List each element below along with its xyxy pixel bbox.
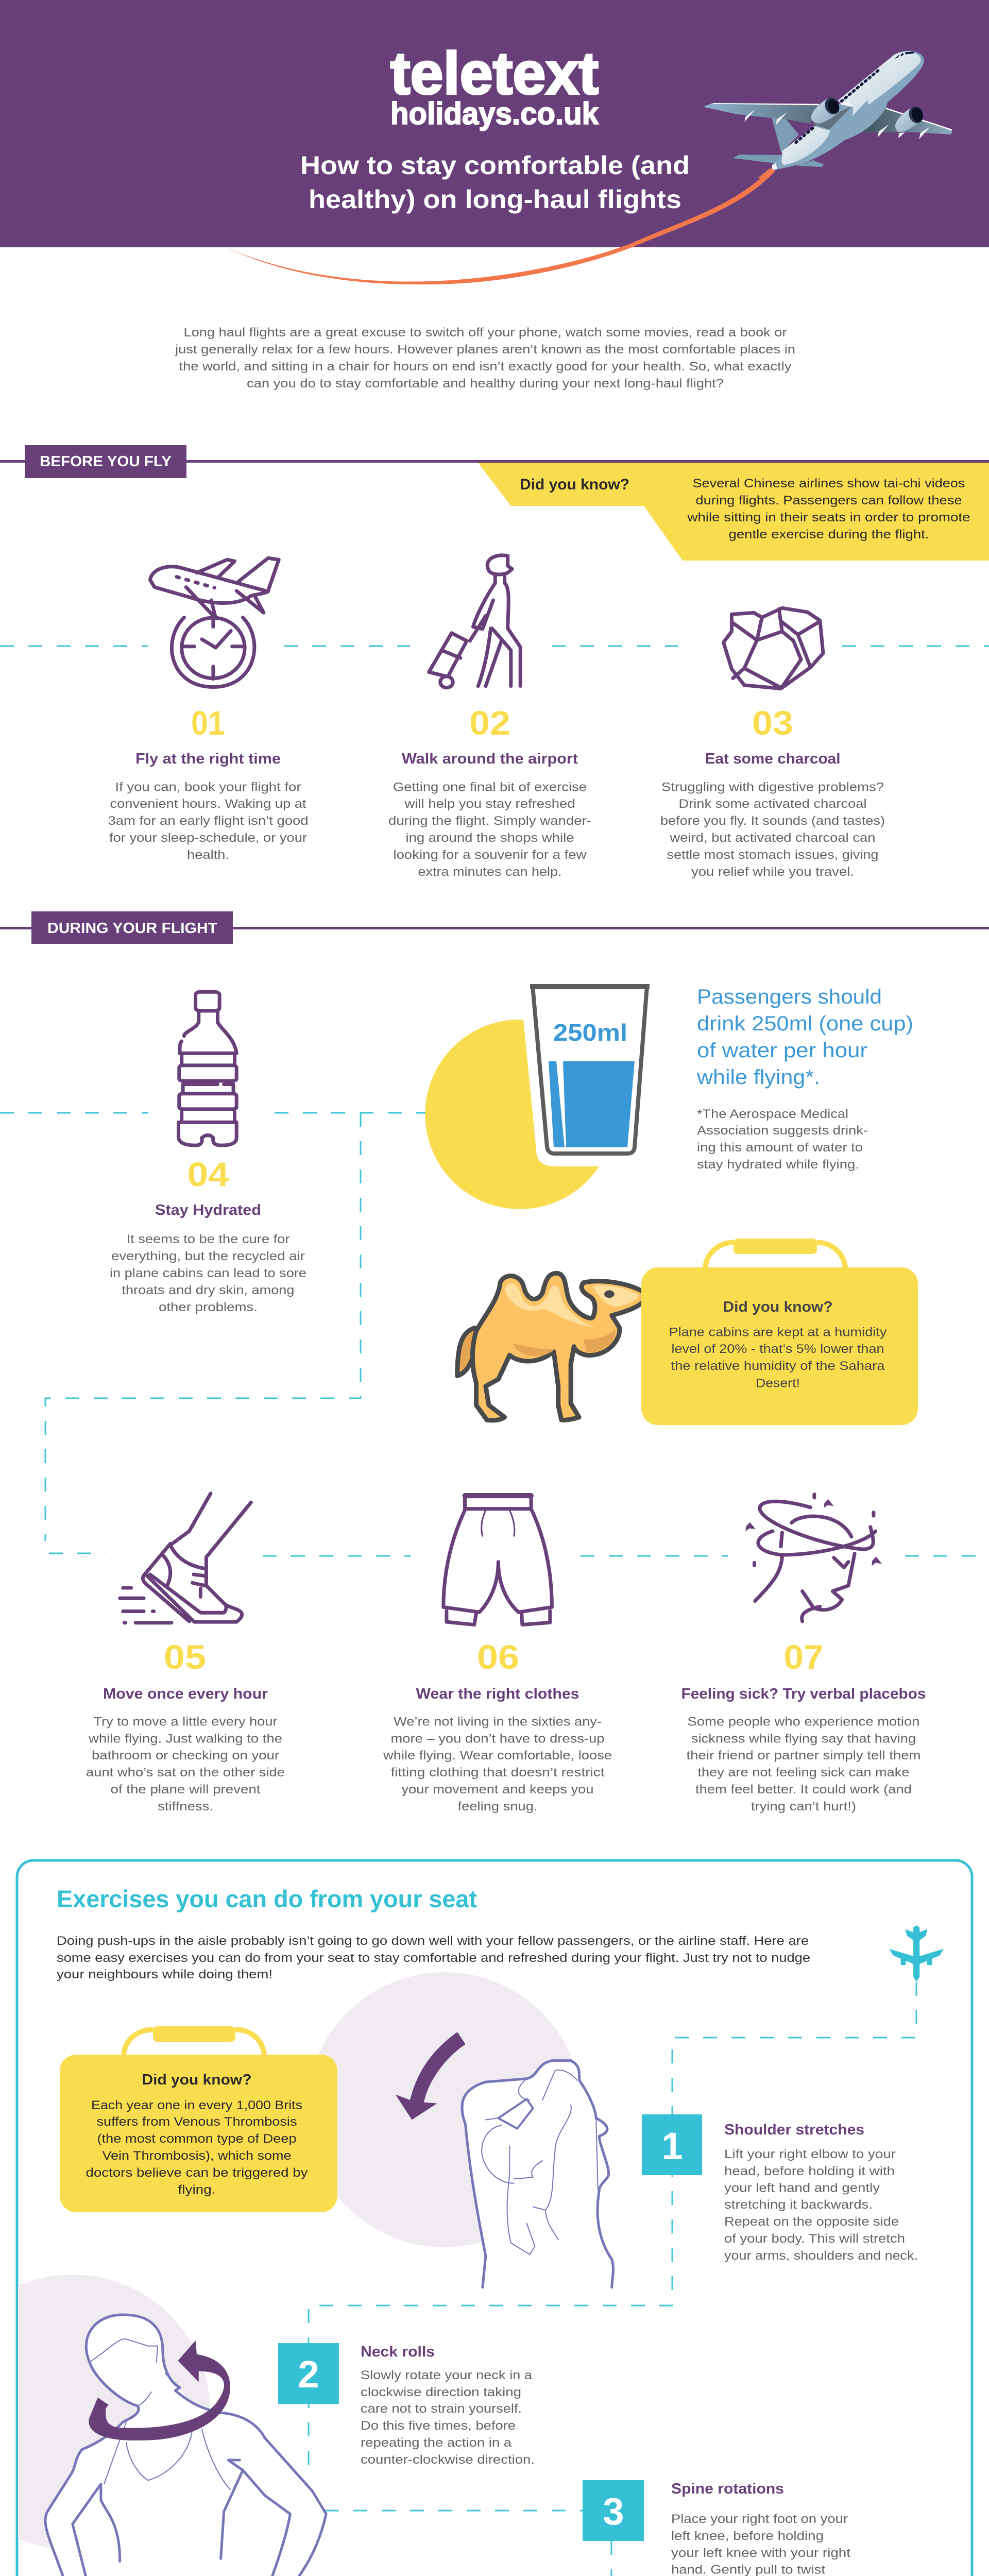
tip 03: weird, but activated charcoal can	[669, 831, 876, 845]
exercises intro: some easy exercises you can do from your seat to stay comfortable and refreshed during your flight. Just try not to nudge	[57, 1951, 810, 1965]
connector: during your flight	[0, 1113, 976, 1556]
tip 04: It seems to be the cure for	[127, 1232, 289, 1246]
stat: water per hour	[696, 986, 913, 1089]
stat: water per hour: while flying*.	[696, 1066, 820, 1089]
step 1 text: your left hand and gently	[724, 2181, 880, 2195]
step 2 text: Slowly rotate your neck in a	[361, 2368, 533, 2382]
callout: cabin humidity suitcase: Plane cabins are kept at a humidity	[669, 1325, 887, 1340]
tip 01: Fly at the right time	[135, 751, 281, 767]
tip 07: 07	[784, 1638, 823, 1676]
tip 04: throats and dry skin, among	[122, 1283, 295, 1297]
exercises intro: your neighbours while doing them!	[57, 1968, 272, 1981]
step 3 text: Place your right foot on your	[671, 2512, 848, 2526]
icon: dizzy head	[745, 1494, 882, 1621]
callout: tai-chi did you know: while sitting in their seats in order to promote	[687, 511, 970, 524]
callout: DVT suitcase: suffers from Venous Thrombosis	[97, 2115, 297, 2129]
callout: cabin humidity suitcase: the relative humidity of the Sahara	[671, 1359, 885, 1373]
callout: DVT suitcase: flying.	[178, 2183, 215, 2197]
tip 02: extra minutes can help.	[418, 865, 561, 879]
connector: before you fly	[0, 645, 989, 647]
tip 02: will help you stay refreshed	[404, 797, 575, 811]
logo: teletext	[390, 40, 599, 107]
figure: neck roll	[45, 2315, 326, 2576]
tip 05	[86, 1638, 285, 1814]
tip 04: Stay Hydrated	[155, 1202, 261, 1218]
step 3 text: your left knee with your right	[671, 2546, 850, 2560]
tip 04: other problems.	[159, 1300, 258, 1314]
callout: DVT suitcase: (the most common type of Deep	[97, 2132, 297, 2146]
step 1 text: your arms, shoulders and neck.	[724, 2249, 918, 2263]
step 2 text: repeating the action in a	[361, 2436, 512, 2450]
footnote: stay hydrated while flying.	[697, 1158, 859, 1172]
stat: water per hour: Passengers should	[697, 986, 882, 1008]
tip 01: 3am for an early flight isn’t good	[108, 814, 308, 828]
exercises intro	[57, 1934, 810, 1981]
tip 04	[110, 1155, 306, 1314]
tip 05: while flying. Just walking to the	[88, 1732, 282, 1746]
step 2 number	[278, 2343, 339, 2404]
icon: water bottle	[179, 992, 236, 1145]
callout: tai-chi did you know: Several Chinese airlines show tai-chi videos	[692, 477, 965, 490]
tip 06: while flying. Wear comfortable, loose	[383, 1749, 612, 1762]
title: How to stay comfortable (and	[300, 151, 690, 180]
tip 05: stiffness.	[158, 1800, 213, 1814]
callout: tai-chi did you know: Did you know?	[520, 476, 629, 493]
step 2 number: 2	[298, 2353, 319, 2396]
step 1 text: Lift your right elbow to your	[724, 2147, 896, 2161]
tip 07: their friend or partner simply tell them	[686, 1749, 921, 1762]
tip 06: We’re not living in the sixties any-	[394, 1715, 602, 1729]
callout: DVT suitcase: Did you know?	[142, 2072, 251, 2088]
step 1 text: Shoulder stretches	[724, 2122, 864, 2138]
tip 02	[388, 704, 591, 879]
tip 06: fitting clothing that doesn’t restrict	[390, 1766, 605, 1780]
callout: DVT suitcase: Each year one in every 1,000 Brits	[91, 2098, 302, 2112]
step 1 number	[642, 2114, 702, 2175]
background circles	[18, 1972, 573, 2548]
tip 06: feeling snug.	[457, 1800, 538, 1814]
title: healthy) on long-haul flights	[309, 185, 681, 214]
icon: moving shoe	[120, 1494, 251, 1623]
tip 01: 01	[191, 704, 225, 742]
section heading: before you fly	[0, 445, 989, 478]
exercises intro: Doing push-ups in the aisle probably isn’t going to go down well with your fellow passengers, or the airline staff. Here are	[57, 1934, 809, 1948]
tip 05: bathroom or checking on your	[92, 1749, 279, 1762]
footnote: ing this amount of water to	[697, 1141, 863, 1155]
title	[300, 151, 690, 214]
step 3 text: Spine rotations	[671, 2481, 784, 2497]
step 3 text	[671, 2481, 851, 2576]
tip 06: Wear the right clothes	[416, 1686, 579, 1702]
footnote: Association suggests drink-	[697, 1124, 868, 1138]
callout: DVT suitcase: Vein Thrombosis), which some	[102, 2149, 292, 2163]
callout: tai-chi did you know: gentle exercise during the flight.	[728, 528, 929, 541]
step 2 text: counter-clockwise direction.	[361, 2453, 535, 2467]
tip 02: 02	[469, 704, 510, 742]
step 1 text	[724, 2122, 918, 2263]
step 1 text: stretching it backwards.	[724, 2198, 873, 2212]
section heading: during your flight	[0, 911, 989, 944]
step 2 text: care not to strain yourself.	[361, 2402, 522, 2416]
icon: person walking with suitcase	[429, 555, 520, 688]
callout: cabin humidity suitcase: Did you know?	[723, 1299, 832, 1315]
yellow circle behind glass	[425, 1020, 599, 1209]
tip 04: in plane cabins can lead to sore	[110, 1266, 306, 1280]
icon: loose trousers	[444, 1495, 552, 1625]
tip 01: for your sleep-schedule, or your	[109, 831, 307, 845]
tip 01: If you can, book your flight for	[115, 780, 301, 794]
tip 03: before you fly. It sounds (and tastes)	[660, 814, 885, 828]
step 1 text: of your body. This will stretch	[724, 2232, 905, 2246]
tip 01	[108, 704, 308, 862]
tip 03: Drink some activated charcoal	[679, 797, 866, 811]
step 1 number: 1	[661, 2125, 683, 2167]
tip 07: Feeling sick? Try verbal placebos	[681, 1686, 926, 1702]
tip 07: Some people who experience motion	[687, 1715, 920, 1729]
callout: DVT suitcase: doctors believe can be triggered by	[86, 2166, 308, 2180]
callout: DVT suitcase	[60, 2026, 337, 2212]
contrail	[227, 168, 775, 284]
tip 07: sickness while flying say that having	[691, 1732, 916, 1746]
intro text: just generally relax for a few hours. However planes aren’t known as the most comfortable places in	[175, 343, 795, 357]
section heading: before you fly: BEFORE YOU FLY	[40, 453, 172, 470]
tip 03: settle most stomach issues, giving	[667, 848, 879, 862]
step 2 text: Do this five times, before	[361, 2419, 516, 2433]
step 3 text: left knee, before holding	[671, 2529, 824, 2543]
tip 02: looking for a souvenir for a few	[394, 848, 587, 862]
intro text	[175, 326, 795, 391]
tip 01: convenient hours. Waking up at	[110, 797, 306, 811]
tip 05: Try to move a little every hour	[94, 1715, 277, 1729]
tip 02: during the flight. Simply wander-	[388, 814, 591, 828]
step 3 number	[583, 2480, 644, 2541]
step 1 text: Repeat on the opposite side	[724, 2215, 899, 2229]
connector: exercises	[309, 1982, 916, 2576]
tip 06: more – you don’t have to dress-up	[390, 1732, 605, 1746]
icon: plane over clock	[150, 558, 279, 687]
step 1 text: head, before holding it with	[724, 2164, 895, 2178]
stat: water per hour: of water per hour	[697, 1039, 867, 1062]
stat: water per hour: drink 250ml (one cup)	[697, 1012, 913, 1035]
tip 03: Struggling with digestive problems?	[661, 780, 884, 794]
tip 04: everything, but the recycled air	[111, 1249, 305, 1263]
tip 03	[660, 704, 885, 879]
step 3 number: 3	[603, 2490, 624, 2533]
tip 02: Getting one final bit of exercise	[393, 780, 587, 794]
tip 07	[681, 1638, 926, 1814]
tip 02: ing around the shops while	[406, 831, 574, 845]
panel: exercises frame	[17, 1860, 972, 2576]
section heading: during your flight: DURING YOUR FLIGHT	[47, 920, 217, 937]
tip 05: of the plane will prevent	[110, 1783, 261, 1797]
tip 07: them feel better. It could work (and	[695, 1783, 912, 1797]
step 2 text: clockwise direction taking	[361, 2385, 521, 2399]
intro text: can you do to stay comfortable and healthy during your next long-haul flight?	[247, 377, 724, 391]
tip 07: they are not feeling sick can make	[697, 1766, 910, 1780]
footnote	[697, 1107, 868, 1172]
tip 05: 05	[164, 1638, 206, 1676]
tip 02: Walk around the airport	[402, 751, 578, 767]
figure: shoulder stretch	[396, 2032, 613, 2287]
tip 05: aunt who’s sat on the other side	[86, 1766, 285, 1780]
intro text: the world, and sitting in a chair for hours on end isn’t exactly good for your health. So, what exactly	[179, 360, 791, 374]
icon: charcoal rock	[724, 608, 823, 689]
icon: camel	[457, 1273, 645, 1420]
logo: holidays.co.uk	[390, 96, 599, 131]
tip 03: 03	[752, 704, 793, 742]
tip 06: 06	[477, 1638, 519, 1676]
callout: cabin humidity suitcase: Desert!	[756, 1377, 800, 1390]
intro text: Long haul flights are a great excuse to switch off your phone, watch some movies, read a book or	[183, 326, 787, 340]
callout: tai-chi did you know: during flights. Passengers can follow these	[695, 494, 962, 507]
tip 03: Eat some charcoal	[705, 751, 841, 767]
step 2 text	[361, 2344, 535, 2467]
callout: tai-chi did you know	[478, 463, 989, 561]
icon: glass of water: 250ml	[553, 1019, 627, 1046]
step 2 text: Neck rolls	[361, 2344, 435, 2360]
exercises heading: Exercises you can do from your seat	[57, 1885, 477, 1912]
icon: glass of water	[530, 984, 650, 1154]
tip 01: health.	[187, 848, 229, 862]
header banner	[0, 0, 989, 247]
footnote: *The Aerospace Medical	[697, 1107, 848, 1121]
tip 03: you relief while you travel.	[691, 865, 854, 879]
tip 05: Move once every hour	[103, 1686, 268, 1702]
callout: cabin humidity suitcase	[641, 1239, 918, 1425]
tip 04: 04	[187, 1155, 229, 1193]
icon: small teal plane	[890, 1925, 944, 1982]
tip 07: trying can’t hurt!)	[751, 1800, 856, 1814]
icon: airplane	[703, 50, 952, 178]
tip 06: your movement and keeps you	[402, 1783, 593, 1797]
callout: cabin humidity suitcase: level of 20% - that’s 5% lower than	[672, 1342, 884, 1356]
tip 06	[383, 1638, 612, 1814]
